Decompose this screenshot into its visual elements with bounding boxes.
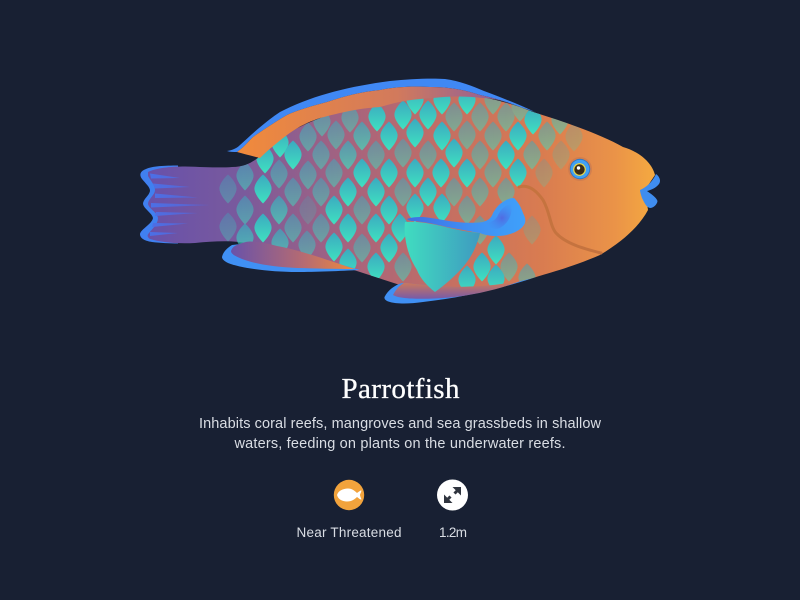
- dorsal fin: [227, 79, 535, 158]
- anal fin: [222, 242, 360, 272]
- description text: [199, 416, 602, 452]
- eye: [568, 157, 592, 181]
- illustration: parrotfish: [140, 79, 660, 304]
- scale pattern: [219, 86, 583, 294]
- fish body: [148, 93, 655, 294]
- status label: Near Threatened: [296, 525, 402, 540]
- pectoral fin: [405, 198, 525, 292]
- ventral fin: [384, 278, 533, 304]
- size label: 1.2m: [439, 525, 467, 540]
- icon: conservation status fish: [334, 480, 364, 510]
- gill line: [519, 186, 601, 253]
- description text: Inhabits coral reefs, mangroves and sea grassbeds in shallow: [199, 416, 602, 432]
- tail fin outer edge: [140, 166, 178, 244]
- tail fin rays: [150, 174, 210, 236]
- title: Parrotfish: [342, 373, 460, 405]
- icon: size arrows: [437, 480, 468, 510]
- description text: waters, feeding on plants on the underwater reefs.: [234, 436, 566, 452]
- lips: [640, 174, 660, 208]
